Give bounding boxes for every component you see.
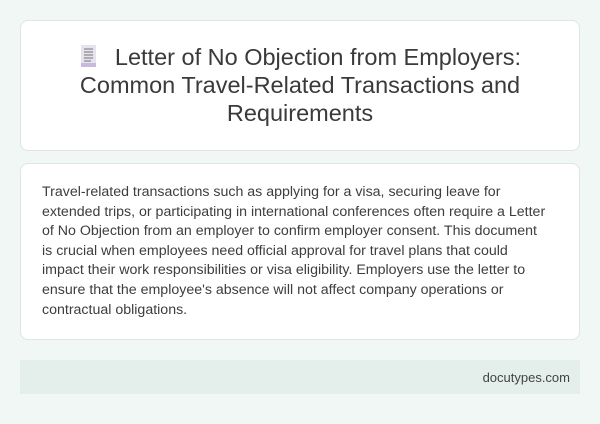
- title: Common Travel-Related Transactions and: [80, 72, 520, 98]
- panel: description card: [20, 163, 580, 340]
- panel: title card: [20, 20, 580, 151]
- icon: document: [81, 45, 96, 67]
- title: Letter of No Objection from Employers:: [115, 44, 521, 70]
- text block: description: impact their work responsibilities or visa eligibility. Employers use the letter to: [42, 262, 525, 278]
- text block: description: extended trips, or participating in international conferences often require a Letter: [42, 204, 545, 220]
- text block: description: is crucial when employees need official approval for travel plans that could: [42, 243, 508, 259]
- title: [80, 44, 521, 126]
- text block: description: contractual obligations.: [42, 302, 187, 318]
- title: Requirements: [227, 100, 373, 126]
- text block: description: of No Objection from an employer to confirm employer consent. This document: [42, 223, 537, 239]
- footer: docutypes.com: [483, 370, 570, 385]
- text block: description: Travel-related transactions such as applying for a visa, securing leave for: [42, 184, 500, 200]
- footer: [20, 360, 580, 394]
- text block: description: [42, 184, 545, 318]
- text block: description: ensure that the employee's absence will not affect company operations or: [42, 282, 503, 298]
